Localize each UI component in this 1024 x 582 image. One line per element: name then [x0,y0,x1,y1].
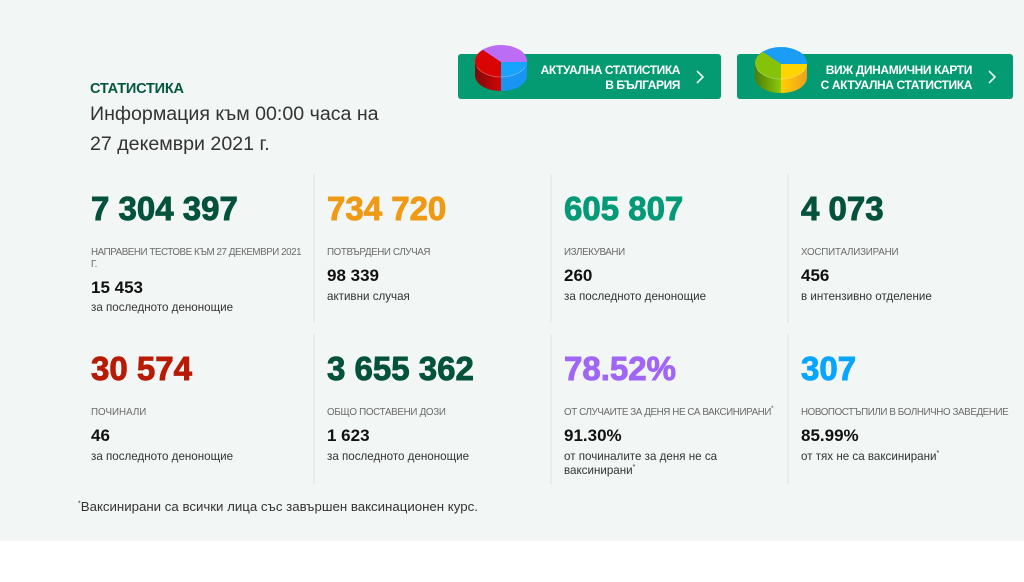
number: 7 304 397 [91,190,238,226]
caption: за последното денонощие [327,450,469,463]
label: ИЗЛЕКУВАНИ [564,247,625,258]
panel: tests [91,190,302,314]
caption: за последното денонощие [91,301,233,314]
number: 30 574 [91,350,192,386]
panel: hospitalized [801,190,932,303]
number: 605 807 [564,190,683,226]
caption: активни случая [327,290,410,303]
icon: 3D pie chart green yellow blue [755,47,807,93]
panel: newly hospitalized [801,350,1008,463]
text block: information date [90,103,379,155]
caption: в интензивно отделение [801,290,932,303]
panel: unvaccinated share of cases [564,350,774,477]
button text: АКТУАЛНА СТАТИСТИКА [541,63,680,77]
button: dynamic maps [737,54,1013,99]
caption [564,450,718,477]
button text [541,63,680,92]
caption: за последното денонощие [564,290,706,303]
button text: ВИЖ ДИНАМИЧНИ КАРТИ [826,63,972,77]
label: ОБЩО ПОСТАВЕНИ ДОЗИ [327,407,446,418]
label: ПОТВЪРДЕНИ СЛУЧАЯ [327,247,430,258]
label: ХОСПИТАЛИЗИРАНИ [801,247,898,258]
caption: от тях не са ваксинирани* [801,450,939,463]
button text: В БЪЛГАРИЯ [605,78,680,92]
label [91,247,302,270]
icon: 3D pie chart red blue purple [475,45,527,91]
caption: за последното денонощие [91,450,233,463]
number: 307 [801,350,856,386]
icon: chevron [696,70,704,84]
button text [821,63,972,92]
daily value: 15 453 [91,278,143,297]
caption: ваксинирани* [564,464,635,477]
heading: statistics: СТАТИСТИКА [90,81,184,97]
label: Г. [91,259,97,270]
text block: information date: Информация към 00:00 часа на [90,103,379,125]
text block: information date: 27 декември 2021 г. [90,133,270,155]
daily value: 260 [564,266,592,285]
label: НАПРАВЕНИ ТЕСТОВЕ КЪМ 27 ДЕКЕМВРИ 2021 [91,247,301,258]
label: НОВОПОСТЪПИЛИ В БОЛНИЧНО ЗАВЕДЕНИЕ [801,407,1008,418]
panel: recovered [564,190,706,303]
deaths percentage: 91.30% [564,426,622,445]
intensive care value: 456 [801,266,829,285]
button: current statistics in Bulgaria [458,54,721,99]
daily value: 46 [91,426,110,445]
button text: С АКТУАЛНА СТАТИСТИКА [821,78,972,92]
panel: confirmed cases [327,190,446,303]
active value: 98 339 [327,266,379,285]
panel: deaths [91,350,233,463]
percentage: 85.99% [801,426,859,445]
number: 3 655 362 [327,350,474,386]
number: 734 720 [327,190,446,226]
footnote: *Ваксинирани са всички лица със завършен ваксинационен курс. [78,499,478,514]
icon: chevron [988,70,996,84]
label: ОТ СЛУЧАИТЕ ЗА ДЕНЯ НЕ СА ВАКСИНИРАНИ* [564,406,773,418]
number: 78.52% [564,350,676,386]
caption: от починалите за деня не са [564,450,717,463]
number: 4 073 [801,190,884,226]
daily value: 1 623 [327,426,370,445]
label: ПОЧИНАЛИ [91,407,146,418]
panel: total doses [327,350,474,463]
